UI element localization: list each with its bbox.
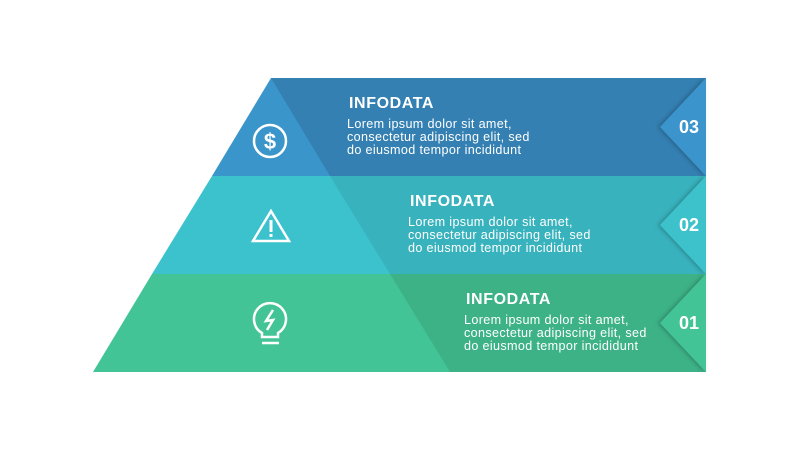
text block 1: consectetur adipiscing elit, sed	[464, 326, 647, 340]
text block 2	[408, 193, 591, 255]
tier 2	[152, 176, 706, 274]
text block 3: consectetur adipiscing elit, sed	[347, 130, 530, 144]
icon: warning	[253, 211, 289, 241]
text block 2: INFODATA	[410, 193, 495, 210]
text block 3	[347, 95, 530, 157]
text block 3: Lorem ipsum dolor sit amet,	[347, 117, 512, 131]
text block 1	[464, 291, 647, 353]
icon: dollar: $	[264, 129, 276, 154]
text block 1: INFODATA	[466, 291, 551, 308]
text block 3: INFODATA	[349, 95, 434, 112]
icon: dollar	[254, 125, 286, 157]
text block 2: do eiusmod tempor incididunt	[408, 241, 582, 255]
tier 1 (bottom)	[93, 274, 706, 372]
text block 2: Lorem ipsum dolor sit amet,	[408, 215, 573, 229]
tier 3 (top)	[212, 78, 706, 176]
text block 3: do eiusmod tempor incididunt	[347, 143, 521, 157]
number 03: 03	[679, 117, 699, 137]
text block 1: do eiusmod tempor incididunt	[464, 339, 638, 353]
text block 2: consectetur adipiscing elit, sed	[408, 228, 591, 242]
number 02: 02	[679, 215, 699, 235]
number 01: 01	[679, 313, 699, 333]
text block 1: Lorem ipsum dolor sit amet,	[464, 313, 629, 327]
icon: bulb	[254, 303, 286, 343]
